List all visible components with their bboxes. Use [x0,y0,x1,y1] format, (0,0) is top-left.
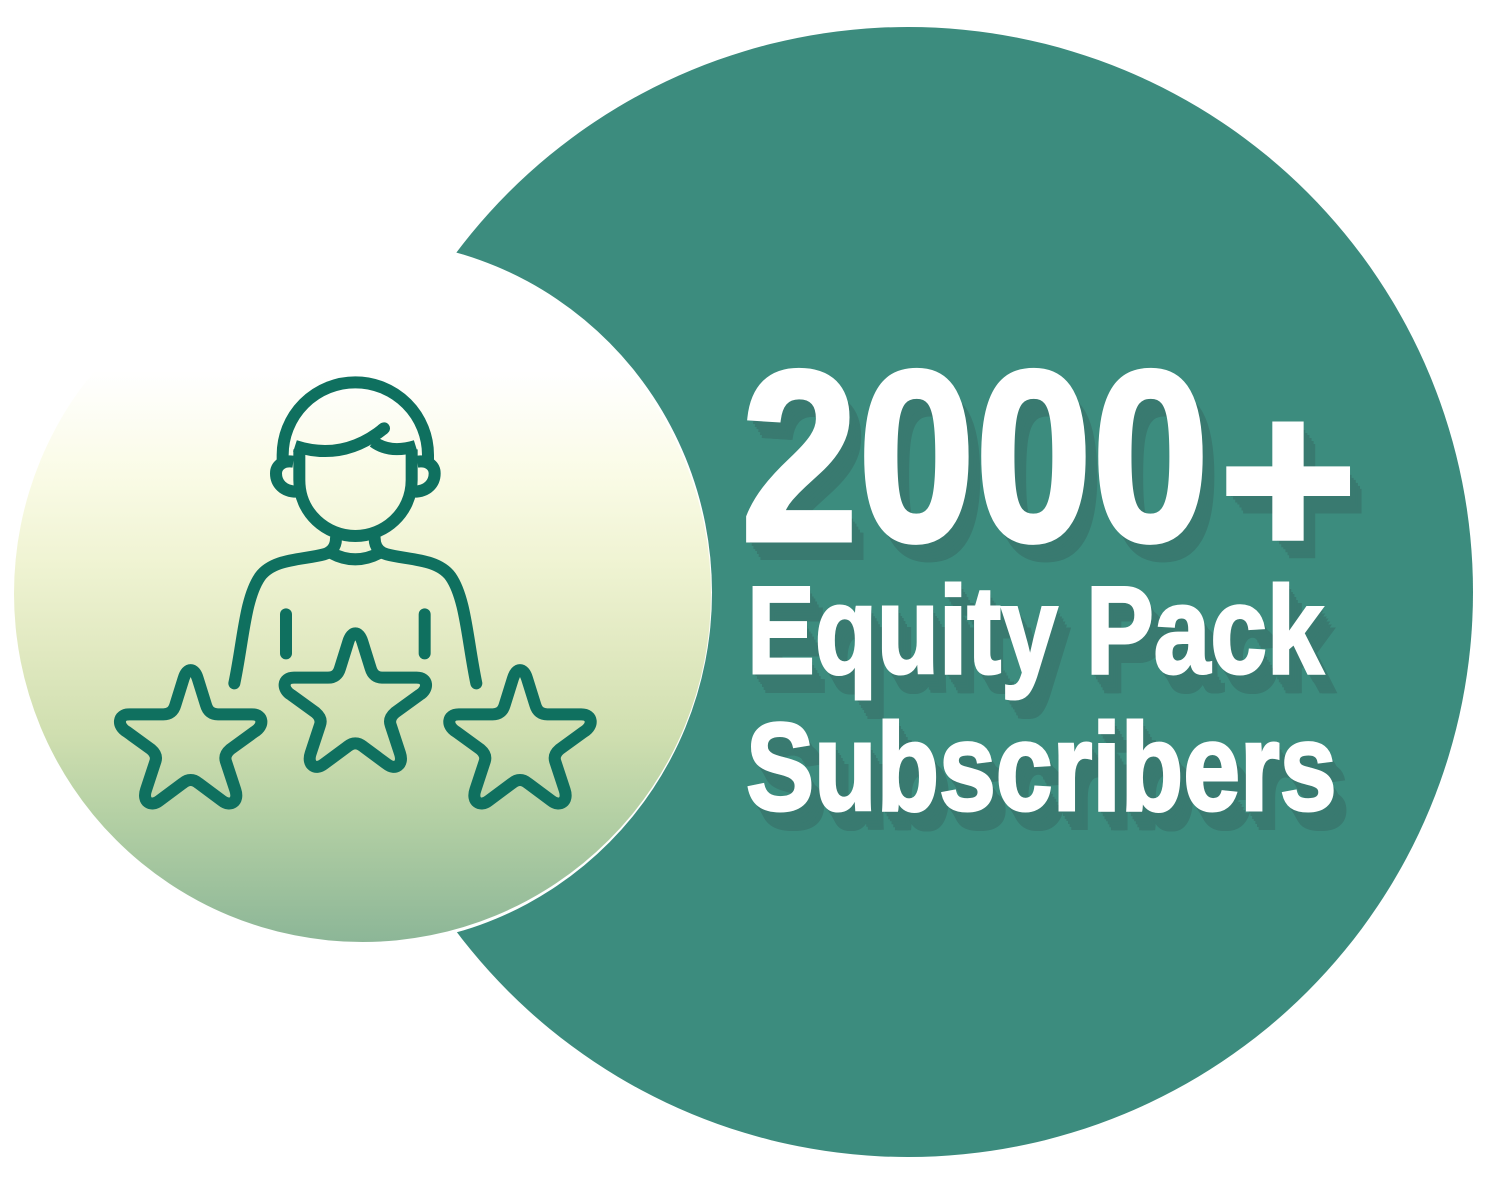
label line: Subscribers: Subscribers [746,699,1337,837]
icon: left shoulder and arm [234,538,336,683]
icon: person with three stars [120,382,591,804]
icon: right star [449,670,591,804]
icon: hair fringe [295,428,384,451]
label line: Equity Pack: Equity Pack [747,562,1323,700]
icon: head and headband [283,382,428,460]
icon: center star [285,633,426,767]
icon: left chest line [268,614,304,653]
icon: hair fringe right [373,442,416,449]
small gradient circle [14,245,711,942]
icon: left ear [276,461,297,492]
icon: right shoulder and arm [375,538,476,683]
white cut-out behind small circle [13,240,712,946]
icon: right chest line [407,614,443,653]
icon: left star [120,670,261,804]
plus sign: + [1219,352,1357,604]
icon: collar [331,553,380,559]
icon: right ear [414,461,435,492]
digits: 2000 [741,321,1209,592]
icon: hair tip [383,428,384,429]
large teal circle [343,27,1473,1157]
icon: face [299,449,412,536]
headline number [741,321,1362,604]
